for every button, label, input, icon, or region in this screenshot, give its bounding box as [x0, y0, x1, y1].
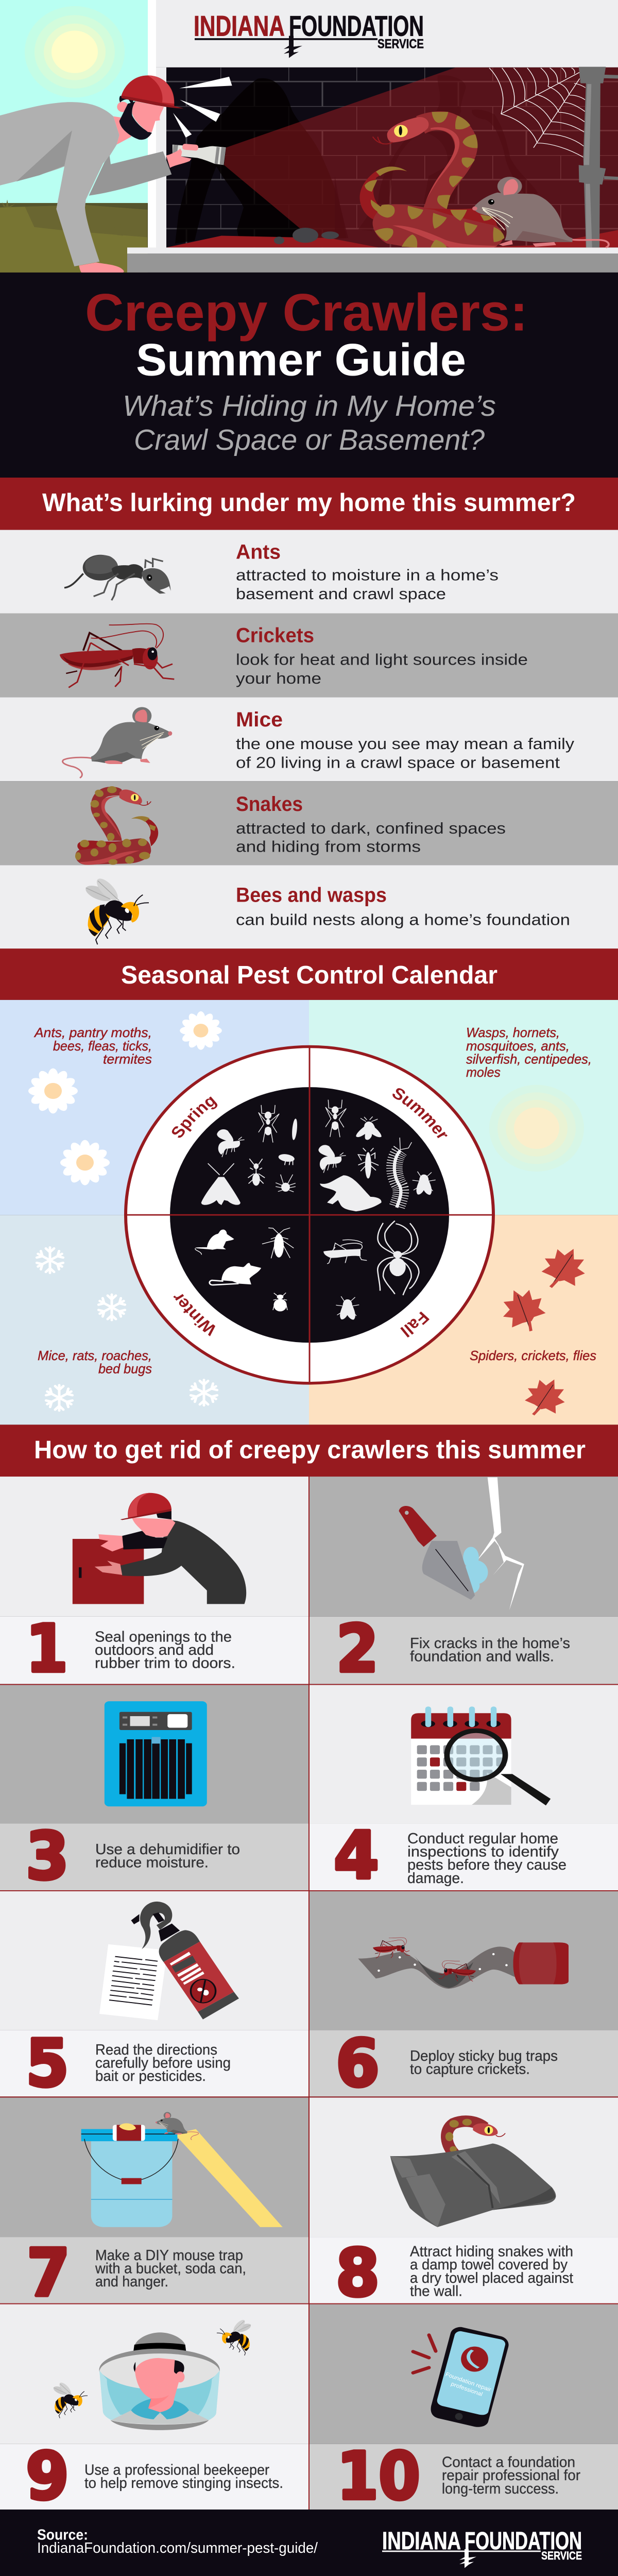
illustration: phone: Foundation repair	[444, 2371, 492, 2393]
text: spring pests: bees, fleas, ticks,	[53, 1039, 152, 1054]
caption	[95, 2247, 246, 2290]
panel: tip 7	[0, 2097, 309, 2311]
icon: ant	[64, 555, 171, 600]
row: bees and wasps	[0, 865, 618, 949]
panel: summer background	[309, 1000, 618, 1215]
panel: tip 10: 10	[337, 2438, 420, 2514]
man's shadow	[175, 78, 346, 244]
text: winter pests	[38, 1348, 152, 1376]
subtitle: Crawl Space or Basement?	[134, 423, 485, 456]
logo: footer: INDIANA	[382, 2527, 461, 2554]
row: ants	[0, 530, 618, 614]
row: bees and wasps: can build nests along a home’s foundation	[236, 911, 570, 928]
panel: tip 4: 4	[334, 1818, 379, 1894]
text: winter pests: Mice, rats, roaches,	[38, 1348, 152, 1363]
heading: what's lurking	[0, 478, 618, 530]
panel: tip 9: 9	[26, 2438, 69, 2514]
row: ants: Ants	[236, 540, 281, 563]
crawl space bricks	[166, 67, 618, 247]
panel: tip 1	[0, 1477, 309, 1687]
heading: seasonal calendar	[0, 948, 618, 1000]
row: mice	[0, 697, 618, 781]
icon: sun	[489, 1085, 584, 1172]
wall	[148, 0, 618, 67]
panel: spring background	[0, 1000, 309, 1215]
caption: damage.	[407, 1870, 464, 1887]
title	[85, 283, 528, 385]
illustration: directions and spray bottle	[99, 1902, 239, 2020]
caption	[442, 2454, 580, 2497]
man with flashlight	[0, 75, 232, 275]
caption: to help remove stinging insects.	[84, 2475, 283, 2492]
row: mice: Mice	[236, 708, 283, 731]
text: fall pests: Spiders, crickets, flies	[470, 1348, 596, 1363]
sun	[25, 6, 125, 97]
logo: footer	[382, 2527, 582, 2568]
caption	[84, 2462, 283, 2492]
row: snakes: and hiding from storms	[236, 838, 421, 855]
caption: Fix cracks in the home’s	[410, 1635, 570, 1652]
subtitle	[123, 389, 496, 456]
caption: Make a DIY mouse trap	[95, 2247, 243, 2264]
panel: tip 8: 8	[336, 2235, 380, 2311]
row: crickets: your home	[236, 669, 321, 687]
caption: with a bucket, soda can,	[95, 2261, 246, 2277]
caption	[95, 2042, 231, 2084]
title panel background	[0, 273, 618, 478]
text: summer pests	[466, 1025, 592, 1080]
snake	[360, 111, 504, 247]
caption: the wall.	[410, 2283, 462, 2299]
logo: Indiana Foundation Service: SERVICE	[377, 37, 424, 51]
caption: Contact a foundation	[442, 2454, 575, 2470]
illustration: phone: professional	[450, 2381, 484, 2398]
caption	[410, 2048, 558, 2077]
mouse	[472, 177, 609, 247]
row: bees and wasps: Bees and wasps	[236, 883, 387, 906]
illustration: worker sealing door	[73, 1493, 246, 1604]
row: mice: of 20 living in a crawl space or basement	[236, 754, 560, 771]
source: Source:	[37, 2527, 88, 2543]
row: crickets: look for heat and light sources inside	[236, 651, 528, 668]
row: mice: the one mouse you see may mean a family	[236, 735, 574, 753]
illustration: sticky trap	[358, 1942, 569, 1989]
row: ants: attracted to moisture in a home’s	[236, 566, 499, 584]
grass	[0, 199, 148, 273]
caption: pests before they cause	[407, 1857, 566, 1873]
caption: Conduct regular home	[407, 1831, 558, 1847]
season labels	[172, 1088, 448, 1337]
caption: a dry towel placed against	[410, 2270, 574, 2286]
caption: Seal openings to the	[95, 1629, 232, 1645]
icon: mouse on bucket	[156, 2112, 199, 2140]
icon: bees	[52, 2318, 252, 2418]
caption: foundation and walls.	[410, 1649, 554, 1665]
panel: tip 2: 2	[336, 1611, 379, 1687]
icon: daisies	[28, 1011, 222, 1185]
caption: bait or pesticides.	[95, 2068, 206, 2084]
season labels: Winter	[173, 1294, 215, 1336]
row: crickets: Crickets	[236, 623, 314, 647]
chart: seasonal wheel	[124, 1045, 495, 1385]
heading: seasonal calendar: Seasonal Pest Control Calendar	[121, 960, 497, 989]
source	[37, 2527, 318, 2556]
caption	[410, 1635, 570, 1665]
shadow on lit wall	[335, 75, 538, 239]
illustration: beekeeper	[99, 2332, 220, 2430]
icon: mouse	[63, 707, 172, 778]
illustration: dehumidifier	[105, 1701, 207, 1806]
panel: tip 1: 1	[26, 1611, 68, 1687]
illustration: trowel fixing crack	[399, 1478, 524, 1611]
text: summer pests: moles	[466, 1065, 501, 1080]
caption: Read the directions	[95, 2042, 217, 2058]
row: snakes: attracted to dark, confined spaces	[236, 819, 506, 837]
caption	[407, 1831, 566, 1887]
panel: tip 5: 5	[26, 2026, 69, 2102]
panel: tip 6: 6	[336, 2026, 380, 2102]
icon: crickets on trap	[373, 1938, 476, 1981]
caption	[410, 2244, 574, 2299]
panel: winter background	[0, 1215, 309, 1425]
caption: reduce moisture.	[95, 1855, 209, 1871]
panel: tip 7: 7	[27, 2235, 70, 2311]
flashlight beam	[224, 67, 618, 247]
caption: and hanger.	[95, 2274, 168, 2290]
caption: Use a dehumidifier to	[95, 1841, 240, 1858]
caption: carefully before using	[95, 2055, 231, 2071]
text: spring pests: termites	[103, 1052, 152, 1066]
row: crickets	[0, 614, 618, 697]
panel: tip 3: 3	[26, 1819, 69, 1894]
silhouettes: fall pests	[323, 1221, 419, 1320]
caption: to capture crickets.	[410, 2061, 530, 2077]
silhouettes: spring pests	[201, 1105, 298, 1205]
panel: tip 9	[0, 2304, 309, 2514]
caption: Attract hiding snakes with	[410, 2244, 573, 2260]
caption	[95, 1841, 240, 1871]
panel: tip 3	[0, 1685, 309, 1894]
caption	[95, 1629, 235, 1671]
caption: Deploy sticky bug traps	[410, 2048, 558, 2064]
silhouettes: winter pests	[195, 1228, 294, 1311]
illustration: calendar and magnifier	[411, 1706, 551, 1805]
row: snakes	[0, 781, 618, 865]
caption: repair professional for	[442, 2467, 580, 2484]
text: spring pests: Ants, pantry moths,	[33, 1025, 152, 1040]
subtitle: What’s Hiding in My Home’s	[123, 389, 496, 422]
source: IndianaFoundation.com/summer-pest-guide/	[37, 2540, 318, 2556]
logo: Indiana Foundation Service: INDIANA	[194, 10, 285, 42]
illustration: snake under towel	[390, 2119, 556, 2227]
icon: leaves	[494, 1241, 593, 1423]
icon: cricket	[60, 624, 174, 687]
ledge	[127, 247, 618, 253]
title: Creepy Crawlers:	[85, 283, 528, 342]
logo: footer: SERVICE	[541, 2549, 582, 2562]
caption: inspections to identify	[407, 1844, 559, 1860]
icon: bee	[83, 875, 149, 944]
caption: Use a professional beekeeper	[84, 2462, 269, 2478]
caption: outdoors and add	[95, 1642, 214, 1658]
caption: a damp towel covered by	[410, 2257, 568, 2273]
floor	[166, 230, 618, 247]
text: winter pests: bed bugs	[98, 1362, 152, 1376]
text: summer pests: mosquitoes, ants,	[466, 1039, 570, 1054]
caption: long-term success.	[442, 2481, 559, 2497]
season labels: Spring	[172, 1096, 217, 1138]
logo: Indiana Foundation Service	[194, 10, 424, 58]
footer	[0, 2510, 618, 2576]
season labels: Fall	[400, 1312, 430, 1337]
spider web and pipe	[489, 67, 618, 247]
panel: tip 5	[0, 1891, 309, 2102]
text: spring pests	[33, 1025, 152, 1066]
logo: Indiana Foundation Service: FOUNDATION	[289, 10, 424, 42]
illustration: bucket mouse trap	[81, 2123, 283, 2227]
panel: tip 6	[309, 1891, 618, 2102]
text: summer pests: Wasps, hornets,	[466, 1025, 560, 1040]
icon: snake	[75, 786, 158, 865]
hero illustration	[0, 0, 618, 275]
illustration: phone	[413, 2327, 509, 2427]
panel: tip 2	[309, 1477, 618, 1687]
text: summer pests: silverfish, centipedes,	[466, 1052, 592, 1066]
row: ants: basement and crawl space	[236, 585, 446, 603]
title: Summer Guide	[136, 335, 466, 385]
caption: rubber trim to doors.	[95, 1655, 235, 1671]
silhouettes: summer pests	[318, 1100, 436, 1211]
icon: snowflakes	[36, 1247, 218, 1411]
season labels: Summer	[392, 1088, 448, 1139]
panel: fall background	[309, 1215, 618, 1425]
row: snakes: Snakes	[236, 792, 303, 816]
panel: tip 10	[309, 2304, 618, 2514]
heading: how to get rid	[0, 1425, 618, 1477]
panel: tip 8	[309, 2097, 618, 2311]
panel: tip 4	[309, 1685, 618, 1894]
rocks	[274, 228, 339, 244]
